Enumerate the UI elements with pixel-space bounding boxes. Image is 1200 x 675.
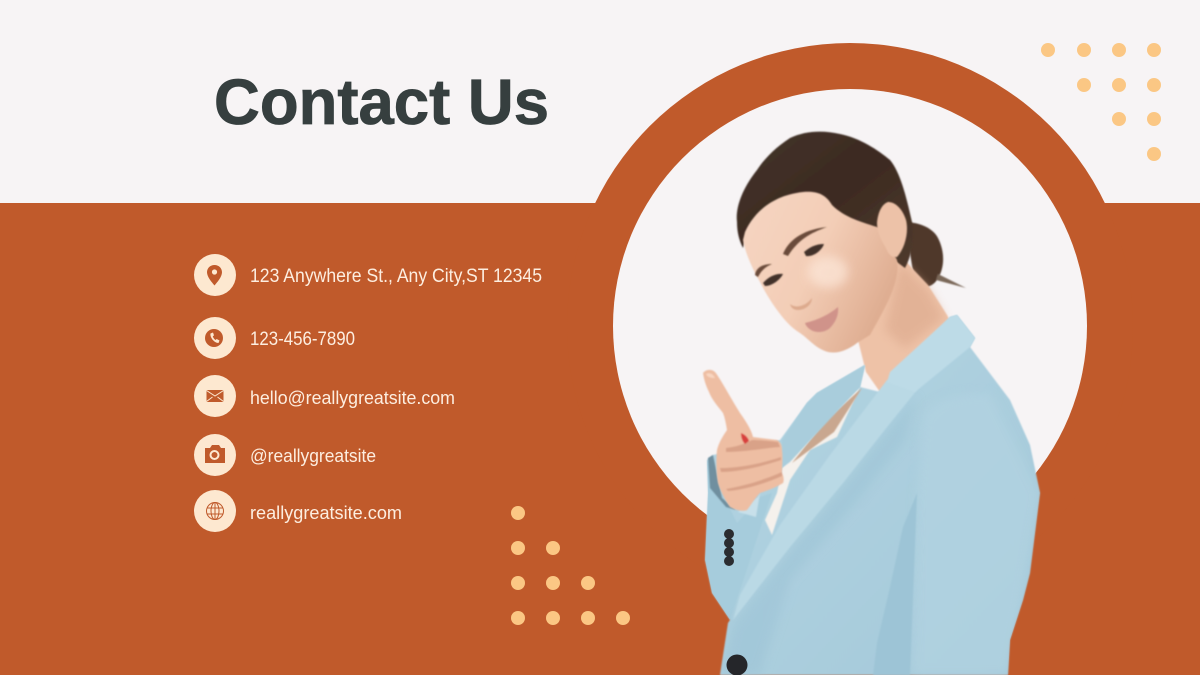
sleeve buttons — [724, 529, 734, 566]
lower lapel shadow — [721, 420, 905, 675]
nose and lips — [790, 298, 838, 332]
shirt — [765, 387, 860, 535]
photo: woman in blue blazer pointing — [703, 132, 1040, 675]
social handle text: @reallygreatsite — [250, 445, 376, 466]
front button — [726, 654, 748, 675]
hair — [737, 132, 913, 268]
pointing hand — [703, 370, 784, 511]
icon: location pin — [194, 254, 236, 296]
neck shadow — [885, 262, 944, 348]
collar — [887, 315, 975, 392]
icon: globe — [194, 490, 236, 532]
white portrait circle — [613, 89, 1087, 563]
website text: reallygreatsite.com — [250, 502, 402, 523]
cheek highlight — [808, 256, 848, 288]
orange lower panel — [0, 203, 1200, 675]
blazer shading (clipped) — [705, 393, 1040, 675]
email text: hello@reallygreatsite.com — [250, 387, 455, 408]
eyebrows and eyes — [755, 227, 827, 286]
main lapel — [733, 380, 917, 620]
dots: top right — [1041, 43, 1161, 161]
contact list — [194, 254, 542, 532]
face — [743, 192, 898, 353]
cuff lining — [708, 455, 736, 510]
phone text: 123-456-7890 — [250, 329, 355, 350]
address text: 123 Anywhere St., Any City,ST 12345 — [250, 266, 542, 287]
sleeve cuff — [705, 462, 764, 620]
ear — [877, 202, 907, 257]
orange arch ring — [567, 43, 1133, 609]
dots: bottom — [511, 506, 630, 625]
blazer body — [705, 315, 1040, 675]
side panel shadow — [873, 493, 917, 675]
title: Contact Us — [214, 66, 549, 138]
left lapel fold — [782, 365, 865, 468]
cuff inner light — [738, 493, 760, 517]
hair bun — [905, 222, 966, 288]
icon: phone — [194, 317, 236, 359]
inner neckline — [792, 388, 862, 463]
icon: camera — [194, 434, 236, 476]
neck — [858, 250, 952, 392]
sleeve arm highlight — [910, 476, 1040, 675]
icon: envelope — [194, 375, 236, 417]
